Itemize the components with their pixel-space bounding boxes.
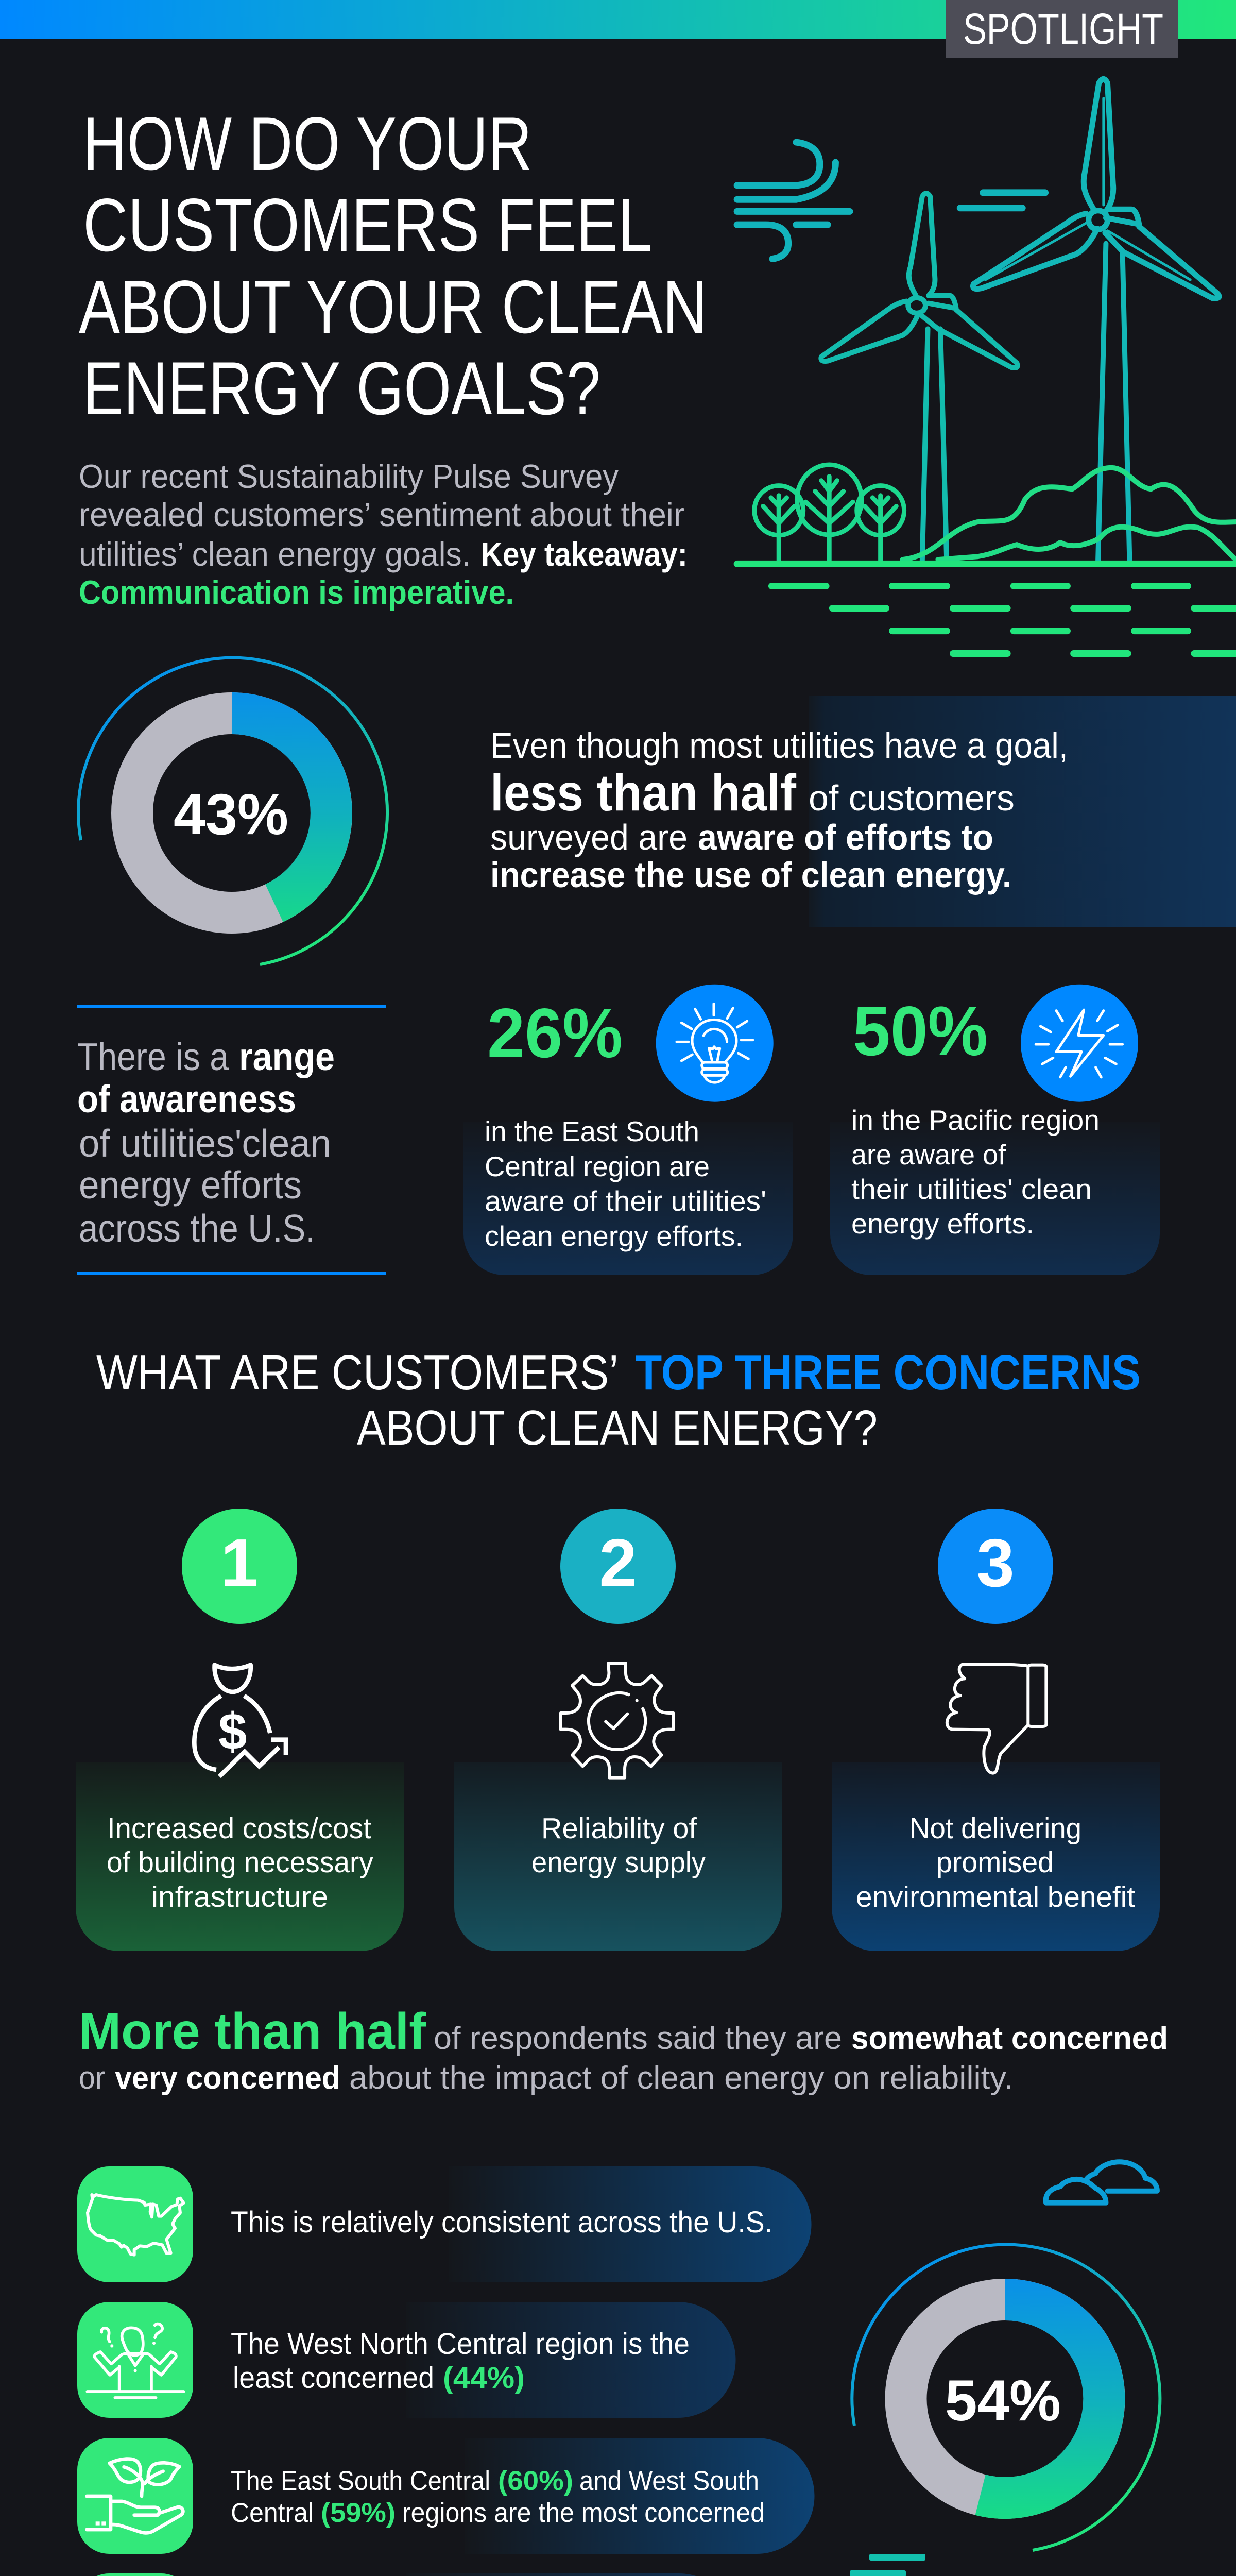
heading: top three concerns: TOP THREE CONCERNS bbox=[636, 1345, 1141, 1400]
icon: money bag with rising arrow bbox=[194, 1665, 286, 1776]
text block: more than half: More than half bbox=[79, 2003, 426, 2060]
icon: trees bbox=[754, 465, 904, 561]
panel: concern 1 costs: of building necessary bbox=[107, 1846, 373, 1879]
panel: 26% east south central: 26% bbox=[487, 994, 623, 1072]
panel: range of awareness bbox=[77, 1005, 386, 1275]
panel: row west north central: (44%) bbox=[443, 2361, 525, 2395]
panel: concern 3 environmental benefit: environmental benefit bbox=[856, 1880, 1135, 1913]
icon: small turbine bbox=[821, 193, 1018, 561]
heading: top three concerns: ABOUT CLEAN ENERGY? bbox=[357, 1400, 878, 1455]
panel: 50% pacific: their utilities' clean bbox=[851, 1173, 1092, 1205]
panel: concern 2 reliability: energy supply bbox=[531, 1846, 706, 1879]
icon: thumbs down bbox=[947, 1664, 1046, 1773]
panel: 50% pacific: energy efforts. bbox=[851, 1208, 1034, 1240]
panel: range of awareness: of utilities'clean bbox=[79, 1122, 331, 1165]
title: HOW DO YOUR bbox=[83, 101, 532, 185]
icon: money bag with rising arrow: $ bbox=[218, 1703, 247, 1760]
panel: concern 2 reliability bbox=[454, 1509, 782, 1951]
panel: row east and west south central: Central bbox=[231, 2498, 314, 2528]
panel: row east and west south central: (60%) bbox=[498, 2466, 573, 2496]
panel: range of awareness: across the U.S. bbox=[79, 1207, 315, 1250]
panel: range of awareness: range bbox=[239, 1035, 335, 1078]
panel: 26% east south central: in the East South bbox=[485, 1115, 699, 1147]
panel: less than half callout: aware of efforts to bbox=[698, 817, 993, 857]
panel: row east and west south central: and West South bbox=[579, 2466, 759, 2496]
chart: 54% donut bbox=[852, 2244, 1160, 2550]
panel: concern 1 costs: Increased costs/cost bbox=[107, 1812, 371, 1845]
panel: concern 2 reliability: Reliability of bbox=[541, 1812, 697, 1845]
panel: less than half callout: surveyed are bbox=[490, 817, 688, 857]
panel: concern 1 costs bbox=[76, 1509, 404, 1951]
panel: row east and west south central bbox=[77, 2438, 815, 2554]
wind dashes bbox=[850, 2554, 966, 2576]
panel: less than half callout: Even though most utilities have a goal, bbox=[490, 725, 1068, 766]
panel: 26% east south central: aware of their utilities' bbox=[485, 1185, 766, 1217]
panel: row east and west south central: The East South Central bbox=[231, 2466, 490, 2496]
panel: concern 3 environmental benefit: promised bbox=[936, 1846, 1054, 1879]
panel: less than half callout: increase the use of clean energy. bbox=[490, 855, 1011, 895]
panel: less than half callout: less than half bbox=[490, 764, 797, 822]
panel: concern 1 costs: infrastructure bbox=[151, 1880, 328, 1913]
icon: shield with check bbox=[77, 2573, 193, 2576]
panel: row west north central: The West North Central region is the bbox=[231, 2327, 690, 2361]
panel: row east and west south central: (59%) bbox=[321, 2498, 396, 2528]
panel: range of awareness: of awareness bbox=[77, 1077, 296, 1121]
icon: hand holding plant bbox=[77, 2438, 193, 2554]
panel: less than half callout: of customers bbox=[809, 778, 1015, 818]
icon: wind lines bbox=[737, 142, 1045, 259]
heading: top three concerns bbox=[96, 1345, 1141, 1455]
panel: range of awareness: There is a bbox=[77, 1035, 229, 1078]
number badge 2: 2 bbox=[599, 1525, 637, 1601]
intro text: Communication is imperative. bbox=[79, 573, 514, 611]
title: ABOUT YOUR CLEAN bbox=[79, 265, 707, 349]
intro text: Our recent Sustainability Pulse Survey bbox=[79, 457, 619, 495]
illustration: wind turbines and landscape bbox=[737, 79, 1236, 654]
number badge 3: 3 bbox=[976, 1525, 1015, 1601]
icon: gear with check bbox=[561, 1663, 673, 1778]
chart: 54% donut: 54% bbox=[945, 2368, 1061, 2433]
text block: more than half: very concerned bbox=[115, 2060, 340, 2096]
panel: row second most cited bbox=[77, 2573, 737, 2576]
panel: 26% east south central bbox=[464, 985, 793, 1275]
panel: 50% pacific: in the Pacific region bbox=[851, 1104, 1100, 1136]
chart: 43% donut: 43% bbox=[174, 782, 288, 846]
number badge 2 bbox=[560, 1509, 676, 1624]
text block: more than half: of respondents said they are bbox=[434, 2021, 842, 2056]
intro text: utilities’ clean energy goals. bbox=[79, 535, 471, 573]
intro text: revealed customers’ sentiment about their bbox=[79, 496, 684, 533]
panel: row east and west south central: regions are the most concerned bbox=[402, 2498, 765, 2528]
intro text bbox=[79, 457, 688, 611]
panel: 26% east south central: clean energy efforts. bbox=[485, 1220, 743, 1252]
icon: confused person bbox=[77, 2302, 193, 2418]
text block: more than half: or bbox=[79, 2060, 105, 2096]
spotlight tag: SPOTLIGHT bbox=[963, 5, 1163, 53]
panel: row west north central: least concerned bbox=[233, 2361, 434, 2395]
title bbox=[79, 101, 707, 430]
panel: 50% pacific: 50% bbox=[853, 992, 988, 1070]
panel: row consistent across U.S. bbox=[77, 2166, 812, 2282]
icon: ground and water dashes bbox=[737, 564, 1236, 654]
panel: range of awareness: energy efforts bbox=[79, 1163, 302, 1207]
panel: concern 3 environmental benefit: Not delivering bbox=[909, 1812, 1082, 1845]
chart: 43% donut bbox=[78, 658, 387, 964]
number badge 1: 1 bbox=[220, 1525, 259, 1601]
panel: row consistent across U.S.: This is relatively consistent across the U.S. bbox=[231, 2206, 772, 2239]
panel: less than half callout bbox=[490, 696, 1236, 927]
icon: light bulb bbox=[656, 985, 774, 1102]
title: ENERGY GOALS? bbox=[83, 346, 600, 430]
icon: U.S. map bbox=[77, 2166, 193, 2282]
panel: concern 3 environmental benefit bbox=[832, 1509, 1160, 1951]
text block: more than half bbox=[79, 2003, 1168, 2096]
panel: row west north central bbox=[77, 2302, 735, 2418]
icon: lightning bolt bbox=[1021, 985, 1138, 1102]
number badge 3 bbox=[938, 1509, 1053, 1624]
heading: top three concerns: WHAT ARE CUSTOMERS’ bbox=[96, 1345, 619, 1400]
icon: large turbine bbox=[973, 79, 1219, 561]
title: CUSTOMERS FEEL bbox=[83, 183, 653, 267]
number badge 1 bbox=[182, 1509, 297, 1624]
top gradient bar bbox=[0, 0, 1236, 39]
icon: hills bbox=[903, 468, 1236, 560]
text block: more than half: somewhat concerned bbox=[851, 2021, 1168, 2056]
intro text: Key takeaway: bbox=[481, 535, 688, 573]
panel: 50% pacific bbox=[830, 985, 1160, 1275]
panel: 26% east south central: Central region are bbox=[485, 1150, 710, 1182]
icon: blue clouds bbox=[1046, 2162, 1157, 2203]
text block: more than half: about the impact of clean energy on reliability. bbox=[349, 2060, 1013, 2096]
panel: 50% pacific: are aware of bbox=[851, 1139, 1006, 1171]
